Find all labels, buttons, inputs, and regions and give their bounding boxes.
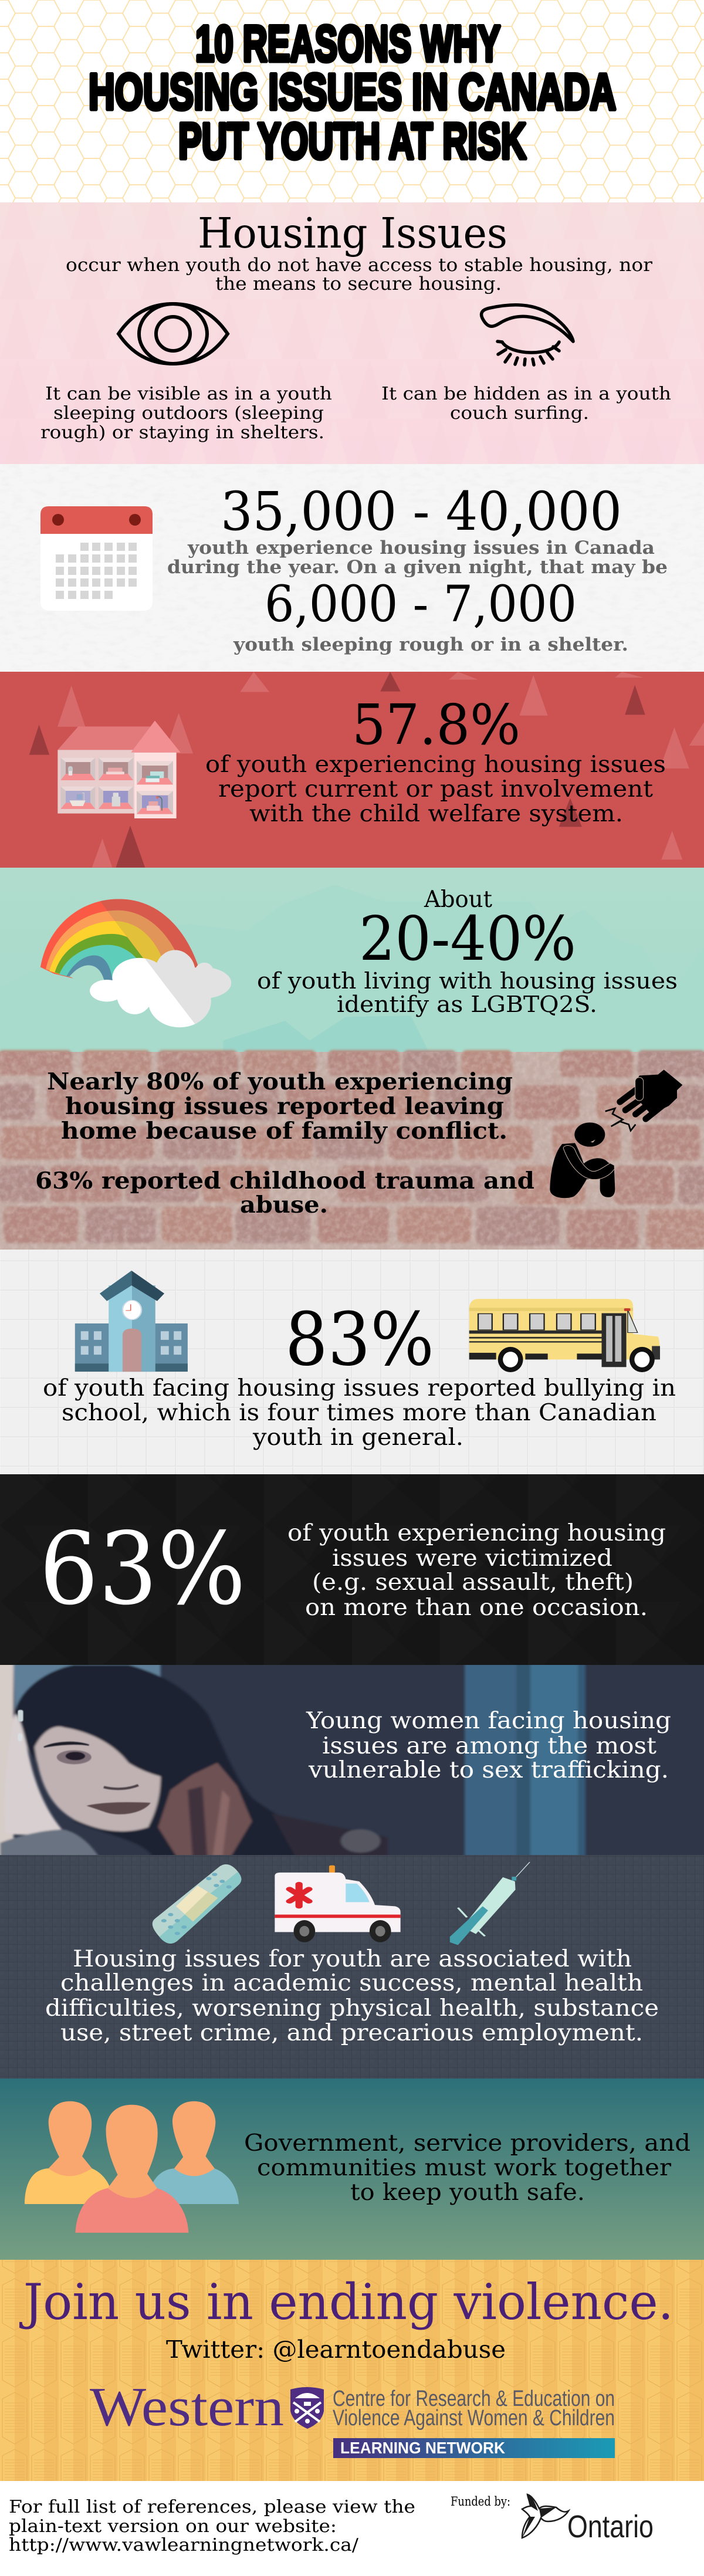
text: family conflict statistic	[47, 1068, 513, 1145]
logo: Ontario: Ontario	[567, 2509, 654, 2544]
icon: three people	[25, 2101, 239, 2233]
icon: ambulance	[275, 1866, 401, 1942]
photo: curtain	[465, 1660, 585, 1860]
text: childhood trauma statistic: abuse.	[240, 1191, 328, 1218]
text: child welfare involvement: of youth experiencing housing issues	[205, 752, 666, 778]
text: sex trafficking vulnerability	[306, 1708, 671, 1783]
panel: working together	[0, 2079, 704, 2260]
text: yearly description	[167, 537, 668, 578]
definition text: the means to secure housing.	[215, 273, 502, 295]
stat: 20-40%: 20-40%	[359, 903, 576, 974]
logo: Centre for Research and Education: Centre for Research & Education on	[333, 2387, 615, 2411]
text: associated challenges: difficulties, worsening physical health, substance	[45, 1995, 659, 2022]
icon: dollhouse cutaway	[57, 720, 181, 818]
text: bullying description: of youth facing housing issues reported bullying in	[43, 1375, 676, 1402]
icon: school bus	[469, 1299, 660, 1372]
panel: LGBTQ2S youth	[0, 868, 704, 1052]
text: nightly description: youth sleeping rough or in a shelter.	[233, 634, 628, 655]
text: hidden housing issues: It can be hidden as in a youth	[381, 384, 671, 404]
text: associated challenges: Housing issues for youth are associated with	[73, 1946, 632, 1972]
panel: victimization	[0, 1474, 704, 1665]
text: call to work together: Government, service providers, and	[244, 2130, 691, 2157]
text: child welfare involvement	[205, 752, 666, 827]
heading: Housing Issues	[198, 209, 507, 258]
text: twitter handle: Twitter: @learntoendabuse	[166, 2335, 506, 2364]
logo: Centre for Research and Education: LEARNING NETWORK	[340, 2439, 505, 2457]
text: references note	[9, 2497, 415, 2555]
panel: footer	[0, 2481, 704, 2576]
icon: open eye	[119, 304, 228, 364]
stat: 63%: 63%	[39, 1511, 246, 1627]
icon: rainbow and cloud	[40, 899, 231, 1027]
logo: Centre for Research and Education: Violence Against Women & Children	[333, 2406, 615, 2431]
text: sex trafficking vulnerability: vulnerable to sex trafficking.	[308, 1757, 669, 1783]
text: bullying description	[43, 1375, 676, 1451]
text: family conflict statistic: Nearly 80% of youth experiencing	[47, 1068, 513, 1095]
text: yearly description: youth experience housing issues in Canada	[187, 537, 655, 558]
logo: Ontario	[522, 2494, 654, 2544]
text: visible housing issues	[40, 384, 332, 443]
panel: call to action and logos	[0, 2260, 704, 2481]
photo: young woman	[0, 1661, 387, 1859]
text: references note: http://www.vawlearningnetwork.ca/	[9, 2535, 359, 2555]
panel: youth numbers	[0, 464, 704, 672]
text: visible housing issues: It can be visible as in a youth	[45, 384, 332, 404]
text: victimization description: (e.g. sexual assault, theft)	[312, 1569, 634, 1596]
text: LGBTQ2S identity	[257, 968, 678, 1017]
text: funded by: Funded by:	[451, 2494, 510, 2509]
text: about: About	[424, 886, 492, 913]
definition text: occur when youth do not have access to stable housing, nor	[66, 255, 652, 276]
text: childhood trauma statistic	[35, 1167, 534, 1218]
text: victimization description: on more than one occasion.	[305, 1595, 648, 1621]
text: bullying description: school, which is four times more than Canadian	[62, 1400, 656, 1426]
text: hidden housing issues: couch surfing.	[450, 403, 589, 424]
icon: syringe	[450, 1862, 530, 1945]
text: references note: For full list of references, please view the	[9, 2497, 415, 2517]
text: associated challenges	[45, 1946, 659, 2046]
icon: bandage	[153, 1864, 241, 1944]
panel: young women and trafficking	[0, 1660, 704, 1860]
text: family conflict statistic: home because of family conflict.	[61, 1118, 507, 1145]
stat: 57.8%: 57.8%	[352, 693, 520, 757]
icon: hand striking crouched person	[550, 1069, 682, 1198]
text: references note: plain-text version on our website:	[9, 2516, 337, 2537]
panel: title header	[0, 0, 704, 202]
text: visible housing issues: rough) or staying in shelters.	[40, 422, 324, 443]
panel: family conflict	[0, 1052, 704, 1250]
text: family conflict statistic: housing issues reported leaving	[65, 1093, 504, 1120]
heading: join us: Join us in ending violence.	[19, 2273, 673, 2331]
text: associated challenges: challenges in academic success, mental health	[60, 1970, 643, 1996]
icon: closed eye	[482, 305, 573, 365]
logo: Western University: Western	[90, 2377, 284, 2438]
text: call to work together: communities must work together	[257, 2155, 671, 2181]
title	[89, 16, 616, 170]
text: victimization description: issues were victimized	[332, 1545, 612, 1572]
panel: housing issues definition	[0, 202, 704, 464]
text: childhood trauma statistic: 63% reported childhood trauma and	[35, 1167, 534, 1194]
text: LGBTQ2S identity: of youth living with housing issues	[257, 968, 678, 994]
text: associated challenges: use, street crime, and precarious employment.	[60, 2020, 643, 2046]
text: visible housing issues: sleeping outdoors (sleeping	[53, 403, 324, 424]
text: sex trafficking vulnerability: Young women facing housing	[306, 1708, 671, 1734]
text: call to work together	[244, 2130, 691, 2206]
panel: child welfare	[0, 672, 704, 868]
text: LGBTQ2S identity: identify as LGBTQ2S.	[337, 991, 597, 1017]
panel: school bullying	[0, 1250, 704, 1474]
logo: Centre for Research and Education	[333, 2387, 615, 2458]
definition text	[66, 255, 652, 295]
text: victimization description: of youth experiencing housing	[287, 1520, 666, 1546]
text: victimization description	[287, 1520, 666, 1621]
icon: school building	[75, 1271, 188, 1372]
text: child welfare involvement: with the child welfare system.	[249, 801, 623, 827]
text: sex trafficking vulnerability: issues are among the most	[322, 1733, 656, 1759]
text: child welfare involvement: report current or past involvement	[218, 776, 653, 803]
text: yearly description: during the year. On a given night, that may be	[167, 557, 668, 578]
stat: 83%: 83%	[285, 1297, 434, 1382]
title: PUT YOUTH AT RISK	[178, 113, 526, 170]
text: bullying description: youth in general.	[252, 1424, 463, 1451]
stat: yearly youth count: 35,000 - 40,000	[221, 481, 622, 543]
text: hidden housing issues	[381, 384, 671, 424]
title: 10 REASONS WHY	[195, 16, 500, 72]
icon: calendar	[40, 506, 153, 611]
stat: nightly youth count: 6,000 - 7,000	[265, 576, 577, 634]
panel: associated challenges	[0, 1855, 704, 2079]
text: call to work together: to keep youth safe.	[350, 2179, 585, 2206]
